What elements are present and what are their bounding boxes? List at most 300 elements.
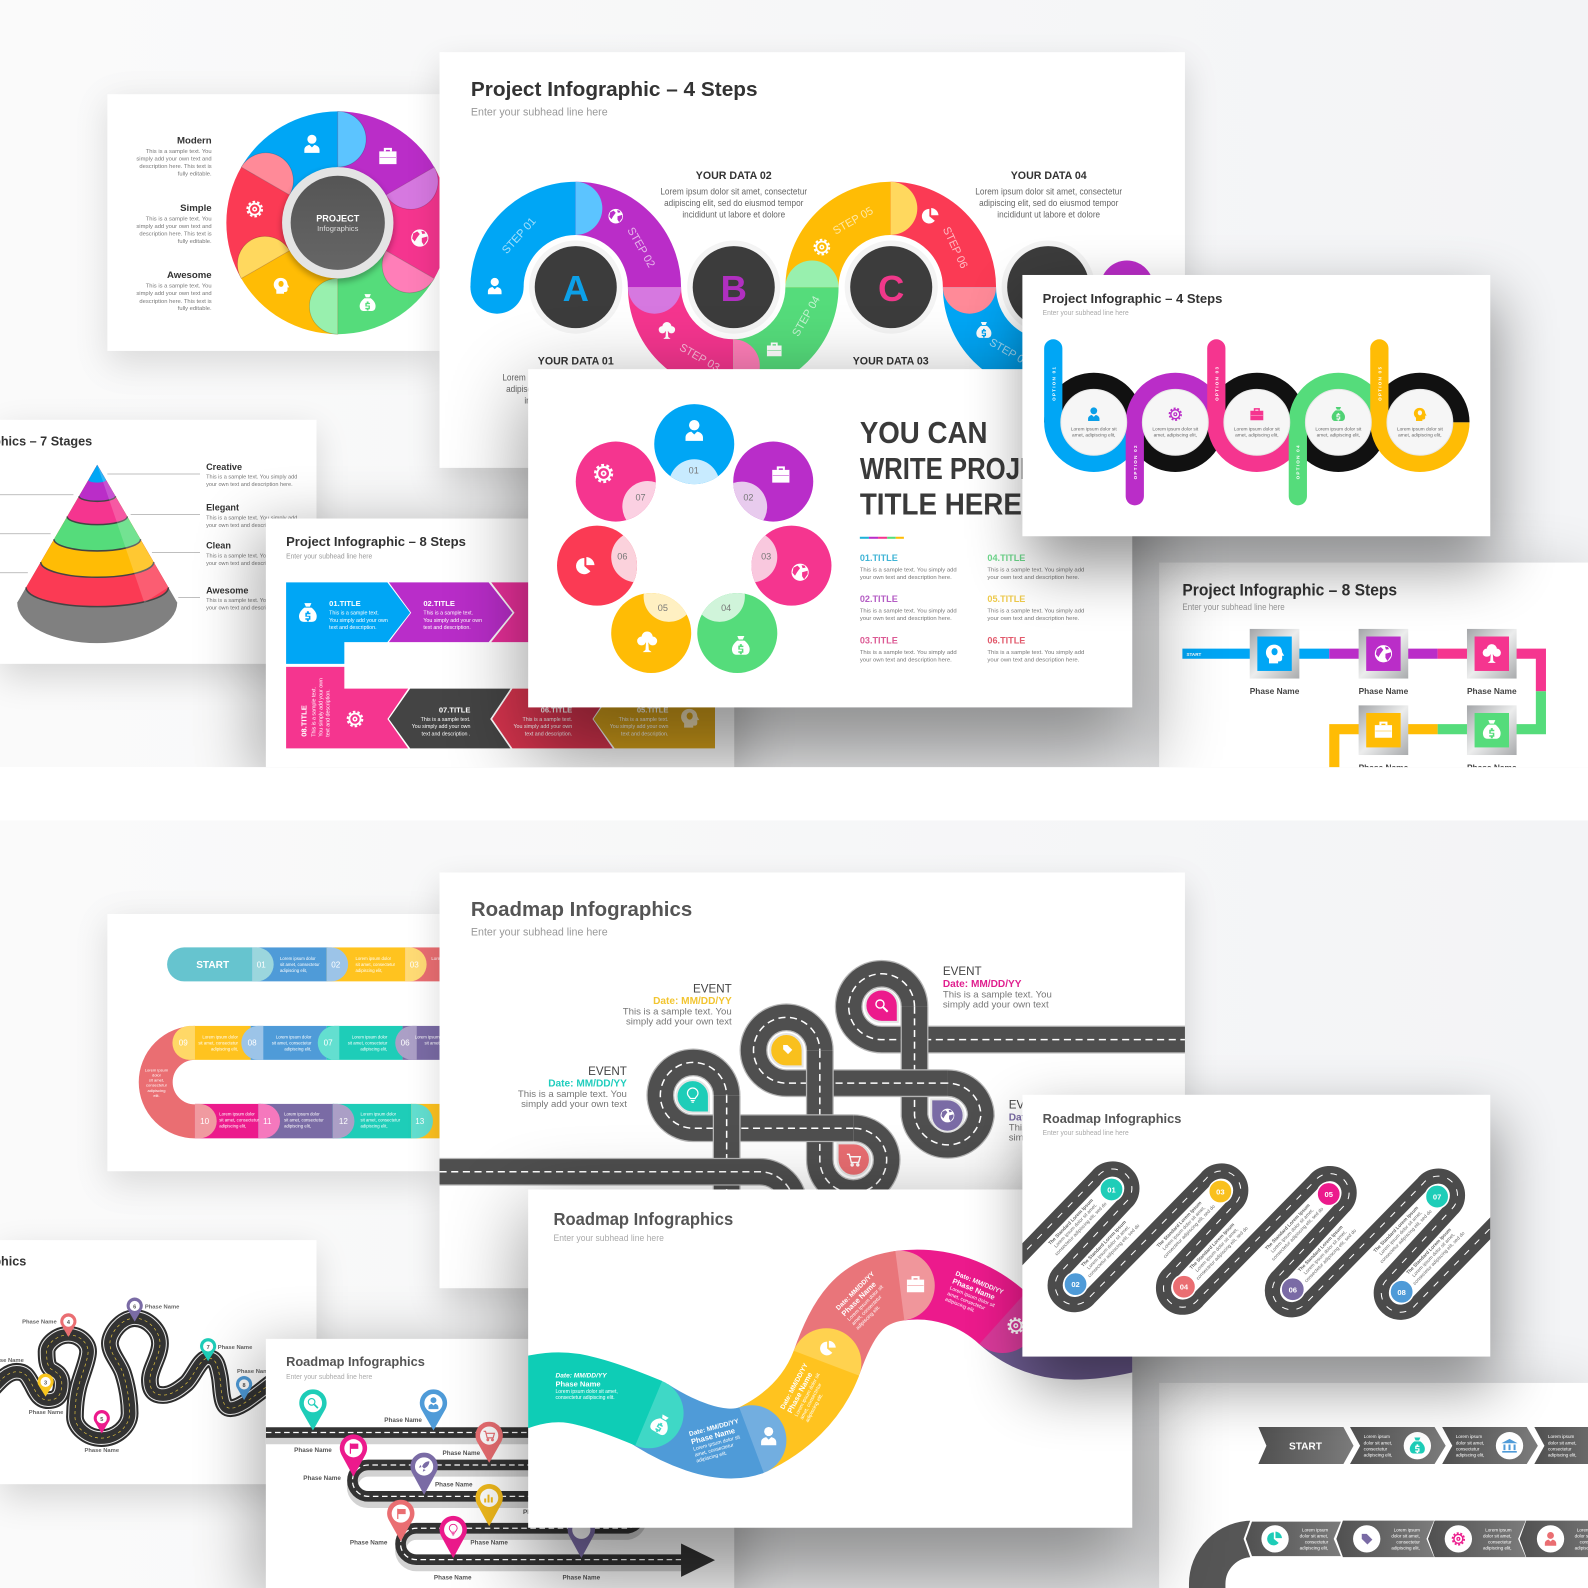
big title: TITLE HERE <box>860 487 1022 521</box>
data text: incididunt ut labore et dolore <box>524 396 627 406</box>
arrow text: You simply add your own <box>319 678 325 737</box>
ribbon text: Lorem ipsum dolor sit <box>846 1284 885 1323</box>
bottom chevrons: consectetur <box>1488 1539 1512 1544</box>
ribbon text: amet, consectetur <box>946 1291 986 1312</box>
chart: six colour wheel: Infographics <box>317 224 359 233</box>
panel: roadmap pins arrow <box>253 1339 734 1588</box>
row one: sit amet, consectetur <box>280 962 320 967</box>
item list: This is a sample text. You simply add <box>860 650 957 656</box>
panel: pill snake <box>107 914 468 1184</box>
row three <box>195 1104 441 1138</box>
panel: chevron road dark <box>1159 1383 1588 1588</box>
phase labels: Phase Name <box>294 1447 332 1454</box>
rotated captions: Lorem ipsum dolor sit amet, <box>1161 1205 1207 1252</box>
curve text: sit amet, <box>149 1078 164 1083</box>
labels: your own text and description here. <box>206 482 293 488</box>
event texts: simply add your own text <box>521 1099 627 1110</box>
data text: YOUR DATA 04 <box>1011 170 1087 182</box>
bottom chevrons: dolor sit amet, <box>1300 1533 1328 1538</box>
event texts: EVENT <box>1009 1098 1047 1111</box>
event texts: Date: MM/DD/YY <box>943 979 1022 990</box>
row three: adipiscing elit, <box>219 1124 246 1129</box>
row one: sit amet, consectetur <box>355 962 396 967</box>
step labels: STEP 03 <box>677 342 721 374</box>
curve text: consectetur <box>146 1083 168 1088</box>
item list: 05.TITLE <box>987 594 1025 604</box>
phase labels: Phase Name <box>1467 763 1517 773</box>
item list <box>860 553 1084 663</box>
panel: diagonal road pills <box>1007 1095 1503 1387</box>
subhead: Enter your subhead line here <box>1043 1129 1129 1137</box>
arrow text: This is a sample text. <box>329 611 379 617</box>
event texts: Date: MM/DD/YY <box>653 996 732 1007</box>
ribbon icons <box>649 1276 1023 1445</box>
step labels: STEP 06 <box>940 225 970 270</box>
path line <box>1182 654 1541 775</box>
labels: Creative <box>206 462 242 472</box>
step labels <box>500 205 1031 374</box>
phase labels: Phase Name <box>470 1539 508 1546</box>
row one: 01 <box>257 961 266 970</box>
stop numbers: 03 <box>1216 1188 1225 1197</box>
panel: you can write title <box>527 369 1144 760</box>
collage: roadmap infographics <box>0 820 1588 1588</box>
bottom chevrons: adipiscing elit, <box>1391 1546 1420 1551</box>
row one: 03 <box>410 961 419 970</box>
arrow text: text and description. <box>329 625 377 631</box>
ribbon text: amet, consectetur <box>851 1294 884 1327</box>
ribbon text: Phase Name <box>951 1277 996 1302</box>
map pins: 5 <box>100 1417 103 1423</box>
stop numbers: 01 <box>1107 1186 1116 1195</box>
top chevrons: Lorem ipsum <box>1548 1434 1574 1439</box>
heading: Project Infographic – 4 Steps <box>471 79 758 101</box>
phase labels: Phase Name <box>1250 686 1300 696</box>
event texts: This is a sample text. You <box>1009 1123 1118 1134</box>
rotated captions: The Standard Lorem Ipsum <box>1156 1200 1203 1249</box>
event texts: This is a sample text. You <box>943 990 1052 1001</box>
item list: your own text and description here. <box>860 657 952 663</box>
labels: Elegant <box>206 502 239 512</box>
stop numbers: 08 <box>1397 1288 1406 1297</box>
ribbon text: Date: MM/DD/YY <box>954 1270 1005 1296</box>
text list: modern simple awesome: fully editable. <box>178 239 212 245</box>
data text: adipiscing elit, sed do eiusmod tempor <box>664 198 803 208</box>
item list: This is a sample text. You simply add <box>987 568 1084 574</box>
bend road <box>1207 1539 1252 1588</box>
row two: adipiscing elit, <box>211 1047 238 1052</box>
text list: modern simple awesome: description here. This text is <box>139 299 212 305</box>
stop numbers: 06 <box>1289 1285 1297 1294</box>
row three: sit amet, consectetur <box>284 1118 324 1123</box>
chain of rings: amet, adipiscing elit, <box>1235 432 1279 438</box>
arrow text: text and description. <box>621 731 668 737</box>
panel: four options chain <box>1022 275 1496 567</box>
step labels: STEP 02 <box>624 225 657 270</box>
chain of rings: amet, adipiscing elit, <box>1317 432 1360 438</box>
labels: your own text and description here. <box>206 561 293 567</box>
ribbon text: Phase Name <box>840 1280 878 1318</box>
top chevrons: START <box>1289 1441 1323 1452</box>
phase labels: Phase Name <box>303 1475 341 1482</box>
data text: YOUR DATA 01 <box>538 356 614 368</box>
event texts: Date: MM/DD/YY <box>1009 1113 1088 1124</box>
item list: your own text and description here. <box>987 575 1080 581</box>
panel: eight steps squares <box>1159 563 1588 782</box>
curve text: Lorem ipsum <box>145 1067 169 1072</box>
text list: modern simple awesome: simply add your own text and <box>136 224 212 230</box>
phase labels: Phase Name <box>145 1304 180 1310</box>
item list: 01.TITLE <box>860 553 898 563</box>
item list: 06.TITLE <box>987 636 1025 646</box>
ribbon text: Lorem ipsum dolor sit <box>794 1372 822 1418</box>
big title <box>860 422 1022 514</box>
bottom chevrons: Lorem ipsum <box>1302 1527 1328 1532</box>
panel: colour ribbon wave <box>506 1189 1144 1580</box>
ribbon text: Date: MM/DD/YY <box>688 1418 740 1438</box>
row two: sit amet, consectetur <box>198 1041 239 1046</box>
row two: 08 <box>248 1039 257 1048</box>
row two: adipiscing elit, <box>360 1047 387 1052</box>
panel: four steps wave <box>440 52 1185 486</box>
circle ring chart <box>557 404 831 673</box>
rotated captions: consectetur adipiscing elit, sed do <box>1162 1204 1217 1260</box>
letter badges <box>529 241 1095 334</box>
row three: Lorem ipsum dolor <box>219 1112 255 1117</box>
arrow head <box>681 1543 715 1577</box>
rotated captions: The Standard Lorem Ipsum <box>1080 1220 1128 1268</box>
text list: modern simple awesome: simply add your own text and <box>136 291 212 297</box>
ribbon text: amet, consectetur <box>799 1382 823 1421</box>
big title: YOU CAN <box>860 416 987 450</box>
row one: 02 <box>331 961 341 970</box>
item list: your own text and description here. <box>987 657 1080 663</box>
labels: This is a sample text. You simply add <box>206 598 297 604</box>
stop numbers <box>1071 1186 1441 1297</box>
item list: This is a sample text. You simply add <box>860 568 957 574</box>
text list: modern simple awesome: description here. This text is <box>139 231 212 237</box>
chain of rings: amet, adipiscing elit, <box>1154 432 1197 438</box>
arrow text: text and description . <box>422 731 470 737</box>
row three: Lorem ipsum dolor <box>361 1112 397 1117</box>
arrow text: You simply add your own <box>329 618 388 624</box>
chain of rings: Lorem ipsum dolor sit <box>1315 426 1362 432</box>
circle ring chart: 06 <box>617 552 627 562</box>
rotated captions: consectetur adipiscing elit, sed do <box>1087 1223 1141 1279</box>
top chevrons <box>1258 1427 1588 1464</box>
data text: adipiscing elit, sed do eiusmod tempor <box>506 384 645 394</box>
event texts: EVENT <box>588 1065 627 1078</box>
chain of rings <box>1051 339 1460 496</box>
arrow text: This is a sample text. <box>423 611 473 617</box>
top chevrons: consectetur <box>1548 1446 1572 1451</box>
subhead: Enter your subhead line here <box>286 1373 372 1381</box>
phase labels: Phase Name <box>1359 686 1409 696</box>
ribbon text: adipiscing elit. <box>855 1305 882 1331</box>
circle ring chart: 05 <box>658 603 668 613</box>
chain of rings: OPTION 04 <box>1295 444 1300 479</box>
text list: modern simple awesome: fully editable. <box>178 172 212 178</box>
phase labels <box>1250 686 1517 773</box>
rotated captions: consectetur adipiscing elit, sed do <box>1271 1206 1325 1262</box>
ribbon text: Phase Name <box>555 1379 601 1388</box>
row two: sit amet <box>424 1041 440 1046</box>
row two: sit amet, consectetur <box>348 1041 388 1046</box>
heading: Roadmap Infographics <box>286 1355 425 1369</box>
heading: Project Infographic – 8 Steps <box>286 535 466 549</box>
labels: Clean <box>206 540 231 550</box>
rotated captions: Lorem ipsum dolor sit amet, <box>1303 1229 1348 1276</box>
phase labels <box>0 1304 272 1454</box>
data text: Lorem ipsum dolor sit amet, consectetur <box>660 186 807 196</box>
chart: six colour wheel: PROJECT <box>316 213 360 223</box>
rotated captions: The Standard Lorem Ipsum <box>1189 1222 1236 1271</box>
step labels: STEP 01 <box>500 216 539 256</box>
ribbon <box>506 1251 1144 1475</box>
road <box>0 1318 273 1438</box>
top chevrons: dolor sit amet, <box>1548 1441 1577 1446</box>
curve <box>156 1043 195 1121</box>
item list: 04.TITLE <box>987 553 1025 563</box>
text list: modern simple awesome: Simple <box>180 203 212 214</box>
phase labels: Phase Name <box>523 1509 561 1516</box>
labels: This is a sample text. You simply add <box>206 516 297 522</box>
ribbon text: adipiscing elit. <box>944 1297 976 1314</box>
map pins: 8 <box>243 1383 246 1389</box>
letter badges: B <box>721 268 747 309</box>
labels: your own text and description here. <box>206 606 293 612</box>
arrow text: This is a sample text. <box>522 717 572 723</box>
rotated captions: consectetur adipiscing elit, sed do <box>1304 1228 1358 1284</box>
data text: YOUR DATA 03 <box>853 356 929 368</box>
letter badges: C <box>878 268 904 309</box>
subhead: Enter your subhead line here <box>1182 602 1285 612</box>
top chevrons: Lorem ipsum <box>1456 1434 1482 1439</box>
labels: This is a sample text. You simply add <box>206 554 297 560</box>
arrow text: You simply add your own <box>610 724 668 730</box>
bottom chevrons <box>1245 1521 1588 1557</box>
rotated captions: Lorem ipsum dolor sit amet, <box>1086 1224 1131 1271</box>
heading: Roadmap Infographics <box>1043 1112 1181 1126</box>
rotated captions <box>1045 1193 1467 1287</box>
subhead: Enter your subhead line here <box>471 926 608 938</box>
labels <box>206 462 297 612</box>
text list: modern simple awesome: description here. This text is <box>139 164 212 170</box>
row three: Lorem ipsum dolor <box>284 1112 320 1117</box>
arrow flow <box>286 582 715 748</box>
ribbon text: adipiscing elit. <box>696 1450 728 1464</box>
data text: Lorem ipsum dolor sit amet, consectetur <box>975 186 1122 196</box>
heading: Project Infographic – 8 Steps <box>1182 582 1397 600</box>
row three: adipiscing elit, <box>361 1124 388 1129</box>
ribbon text: consectetur adipiscing elit. <box>555 1395 615 1401</box>
data text: Lorem ipsum dolor sit amet, consectetur <box>502 372 649 382</box>
rotated captions: Lorem ipsum dolor sit amet, <box>1378 1210 1424 1257</box>
stop numbers: 05 <box>1325 1190 1333 1199</box>
row three: adipiscing elit, <box>284 1124 311 1129</box>
text list: modern simple awesome: simply add your own text and <box>136 157 212 163</box>
top chevrons: adipiscing elit, <box>1548 1452 1577 1457</box>
event texts: EVENT <box>943 965 982 978</box>
row two: 07 <box>324 1039 333 1048</box>
rotated captions: The Standard Lorem Ipsum <box>1372 1205 1420 1254</box>
ribbon text: Lorem ipsum dolor sit amet, <box>555 1389 618 1395</box>
numbered stops <box>1064 1178 1449 1303</box>
arrow text: 08.TITLE <box>299 705 308 737</box>
arrow text: text and description. <box>326 689 332 737</box>
road network <box>440 974 1187 1215</box>
row two: 06 <box>401 1039 410 1048</box>
circle ring chart: 01 <box>689 465 699 475</box>
event texts: simply add your own text <box>626 1016 732 1027</box>
top chevrons: adipiscing elit, <box>1456 1452 1484 1457</box>
chain of rings: OPTION 05 <box>1377 366 1382 401</box>
item list: your own text and description here. <box>860 575 952 581</box>
data text: adipiscing elit, sed do eiusmod tempor <box>979 198 1118 208</box>
bottom chevrons: dolor sit amet, <box>1483 1533 1512 1538</box>
row one: Lorem ipsum dolor <box>355 956 392 961</box>
rotated captions: The Standard Lorem Ipsum <box>1047 1198 1095 1247</box>
heading: Roadmap Infographics <box>471 899 692 921</box>
top chevrons: Lorem ipsum <box>1364 1434 1390 1439</box>
stop numbers: 04 <box>1180 1283 1189 1292</box>
data text <box>502 170 1122 406</box>
bottom chevrons: adipiscing elit, <box>1483 1546 1512 1551</box>
text list: modern simple awesome: Awesome <box>167 270 212 281</box>
arrow text: This is a sample text. <box>619 717 668 723</box>
start tag: START <box>1186 652 1201 657</box>
arrow icons <box>299 603 699 728</box>
arrow text: 06.TITLE <box>541 705 572 714</box>
ribbon text: Date: MM/DD/YY <box>835 1270 877 1312</box>
drop pins <box>299 1389 595 1558</box>
top chevrons: adipiscing elit, <box>1364 1452 1392 1457</box>
row two: Lorem ipsum dolor <box>276 1035 312 1040</box>
event texts <box>518 965 1118 1143</box>
ribbon text <box>555 1270 1005 1464</box>
ribbon text: Lorem ipsum dolor sit <box>949 1285 996 1309</box>
row one: Lorem ipsum dolor <box>431 956 468 961</box>
diagonal road <box>1007 1169 1503 1312</box>
arrow text: You simply add your own <box>514 724 572 730</box>
item list: your own text and description here. <box>860 616 952 622</box>
arrow text: You simply add your own <box>423 618 482 624</box>
phase labels <box>294 1417 601 1581</box>
ribbon text: adipiscing elit. <box>804 1393 825 1424</box>
item list: 03.TITLE <box>860 636 898 646</box>
heading: Project Infographic – 4 Steps <box>1043 292 1222 306</box>
row two: 09 <box>179 1039 188 1048</box>
subhead: Enter your subhead line here <box>286 553 372 561</box>
rotated captions: The Standard Lorem Ipsum <box>1264 1203 1312 1252</box>
bottom chevrons: dolor sit amet, <box>1391 1533 1420 1538</box>
ribbon text: Date: MM/DD/YY <box>779 1362 810 1411</box>
phase squares <box>1250 629 1517 755</box>
row two: Lorem ipsum <box>415 1035 440 1040</box>
row one: START <box>196 960 230 971</box>
row one <box>167 947 468 981</box>
item list: This is a sample text. You simply add <box>987 650 1084 656</box>
circle ring chart: 04 <box>721 603 731 613</box>
item list: your own text and description here. <box>987 616 1080 622</box>
item list: This is a sample text. You simply add <box>987 609 1084 615</box>
event texts: This is a sample text. You <box>623 1006 732 1017</box>
panel: winding road <box>0 1240 316 1499</box>
text list: modern simple awesome: This is a sample text. You <box>146 284 212 290</box>
rotated captions: consectetur adipiscing elit, sed do <box>1195 1225 1250 1282</box>
chain of rings: Lorem ipsum dolor sit <box>1397 426 1443 432</box>
panel: crossing roads <box>440 872 1187 1306</box>
row one: adipiscing elit, <box>355 968 382 973</box>
rotated captions: consectetur adipiscing elit, sed do <box>1379 1209 1434 1265</box>
ribbon text: Phase Name <box>785 1371 814 1415</box>
bottom chevrons: Lorem ipsum <box>1485 1527 1512 1532</box>
wave band <box>470 208 1154 366</box>
row one: adipiscing elit, <box>280 968 307 973</box>
ribbon text: Phase Name <box>690 1426 736 1446</box>
labels: This is a sample text. You simply add <box>206 475 297 481</box>
text list: modern simple awesome: Modern <box>177 135 212 146</box>
event texts: simply add your own text <box>1009 1132 1115 1143</box>
road pins <box>677 989 964 1176</box>
arrow text: 01.TITLE <box>329 599 361 608</box>
phase labels: Phase Name <box>563 1574 601 1581</box>
rotated captions: The Standard Lorem Ipsum <box>1405 1227 1453 1276</box>
arrow text: This is a sample text. <box>311 687 317 737</box>
text list: modern simple awesome: This is a sample text. You <box>146 216 212 222</box>
phase labels: Phase Name <box>384 1417 422 1424</box>
chain of rings: amet, adipiscing elit, <box>1398 432 1442 438</box>
circle ring chart: 03 <box>761 552 771 562</box>
leader lines <box>0 474 200 598</box>
rotated captions: Lorem ipsum dolor sit amet, <box>1270 1208 1315 1254</box>
event texts: This is a sample text. You <box>518 1089 627 1100</box>
phase labels: Phase Name <box>434 1574 472 1581</box>
rotated captions: Lorem ipsum dolor sit amet, <box>1053 1203 1099 1249</box>
phase labels: Phase Name <box>22 1320 57 1326</box>
map pins: 3 <box>44 1380 47 1386</box>
top chevrons: consectetur <box>1456 1446 1480 1451</box>
row three: sit amet, consectetur <box>361 1118 401 1123</box>
top chevrons: dolor sit amet, <box>1456 1441 1484 1446</box>
ribbon text: Date: MM/DD/YY <box>555 1372 607 1379</box>
circle ring chart: 07 <box>635 492 646 502</box>
chain of rings: Lorem ipsum dolor sit <box>1152 426 1199 432</box>
chain of rings: OPTION 03 <box>1214 366 1219 401</box>
row two: adipiscing elit, <box>284 1047 311 1052</box>
text list: modern simple awesome: This is a sample text. You <box>146 149 212 155</box>
row three: sit amet, consectetur <box>219 1118 259 1123</box>
data text: incididunt ut labore et dolore <box>997 210 1100 220</box>
event texts: EVENT <box>693 983 732 996</box>
data text: incididunt ut labore et dolore <box>682 210 785 220</box>
arrow text: This is a sample text. <box>421 717 470 723</box>
arrow text: text and description. <box>525 731 572 737</box>
circle ring chart: 02 <box>743 492 753 502</box>
top chevrons: consectetur <box>1364 1446 1388 1451</box>
wave petals <box>576 182 996 370</box>
phase labels: Phase Name <box>218 1345 253 1351</box>
road rows <box>266 1433 684 1566</box>
map pins <box>37 1298 252 1434</box>
heading: Roadmap Infographics <box>553 1209 733 1229</box>
phase labels: Phase Name <box>29 1410 64 1416</box>
rotated captions: The Standard Lorem Ipsum <box>1297 1225 1344 1273</box>
row two: Lorem ipsum dolor <box>352 1035 388 1040</box>
phase labels: Phase Name <box>443 1450 481 1457</box>
phase labels: Phase Name <box>84 1448 120 1454</box>
subhead: Enter your subhead line here <box>1043 309 1129 317</box>
